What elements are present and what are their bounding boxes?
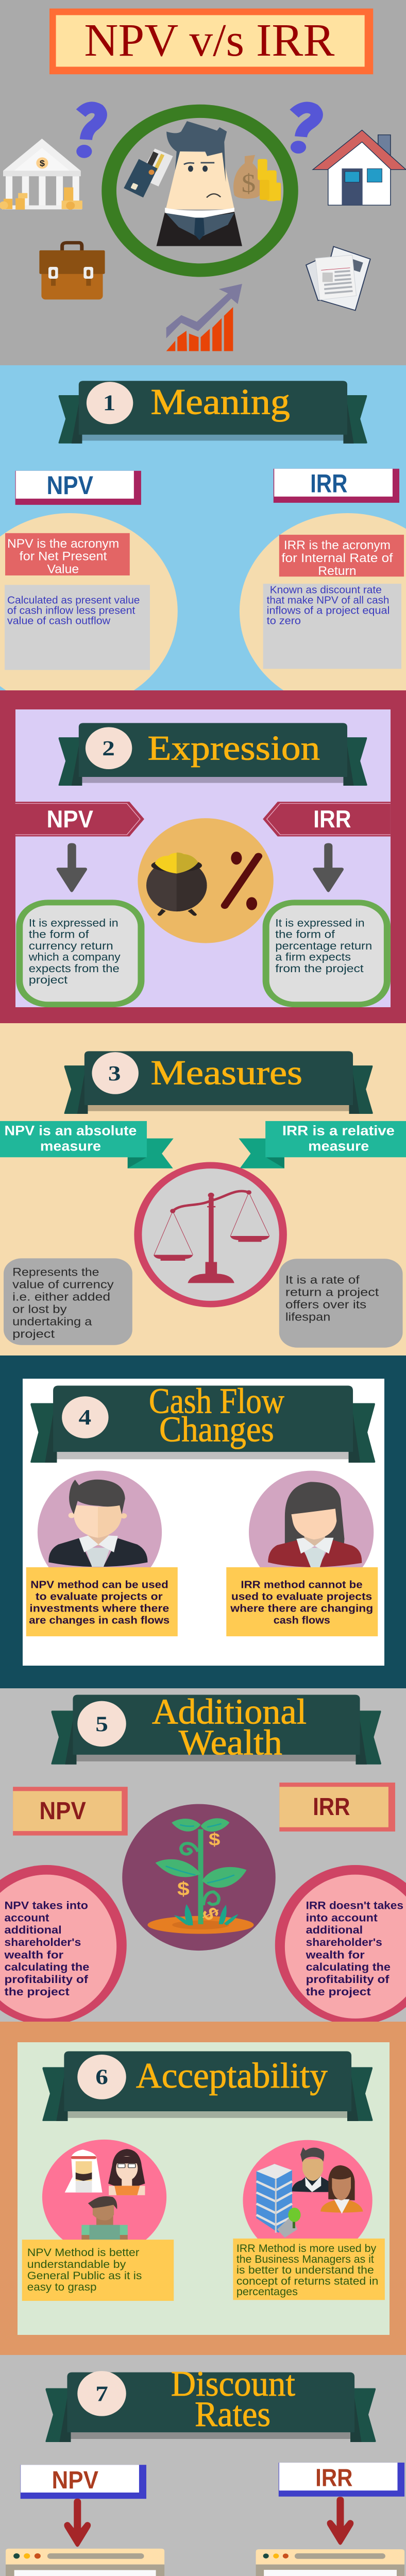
tag: npv: NPV [46,471,93,500]
icon: general public group [42,2140,166,2255]
icon: ring with worried businessman [109,111,291,270]
npv acceptability text: General Public as it is [27,2269,142,2282]
irr wealth text: into account [306,1911,378,1924]
arrow: npv down [64,2499,91,2547]
npv cash flow text: NPV method can be used [30,1579,168,1590]
irr wealth text: shareholder's [306,1936,382,1948]
irr acceptability text: concept of returns stated in [236,2275,378,2287]
banner: 6 acceptability: 6 [95,2065,108,2089]
arrow: npv down [57,843,87,892]
tag: irr [279,2463,404,2497]
banner: 2 expression [58,723,367,786]
npv wealth text: calculating the [5,1961,89,1973]
ribbon: npv absolute measure: measure [40,1139,101,1154]
irr expression: the form of [275,928,335,940]
icon: business managers and building [243,2140,373,2261]
irr measure explanation: return a project [285,1286,379,1299]
tag: irr [274,469,399,503]
npv definition: NPV is the acronym [7,537,119,551]
icon: balance scale [138,1165,283,1304]
irr cash flow text: IRR method cannot be [241,1579,363,1590]
npv wealth text: NPV takes into [5,1899,88,1911]
npv wealth text: profitability of [5,1973,88,1986]
npv measure explanation: project [12,1328,55,1341]
npv wealth text [0,1865,127,2025]
title: NPV v/s IRR [84,14,335,66]
ribbon: npv absolute measure: NPV is an absolute [5,1123,137,1139]
npv expression: the form of [29,928,89,940]
irr wealth text: wealth for [306,1948,365,1961]
npv expression: It is expressed in [29,917,119,929]
npv acceptability text: easy to grasp [27,2281,96,2293]
tag: npv: NPV [39,1797,86,1825]
panel: 5 additional wealth [0,1688,406,2025]
npv measure explanation: i.e. either added [12,1291,110,1303]
tag: irr: IRR [313,1793,350,1821]
irr expression: a firm expects [275,951,351,963]
panel: 6 acceptability [0,2022,406,2355]
npv definition: for Net Present [20,550,107,563]
window: irr discount rate result [256,2549,404,2576]
irr definition: for Internal Rate of [281,551,393,565]
panel: header [0,0,406,365]
icon: money plant: $ [197,1904,224,1924]
tag: npv: NPV [52,2466,98,2494]
irr definition [279,535,404,578]
npv cash flow text [26,1567,178,1636]
irr calculation: that make NPV of all cash [267,595,389,606]
icon: male avatar [38,1471,162,1594]
npv wealth text: account [5,1911,49,1924]
banner: 2 expression: 2 [102,737,115,760]
npv measure explanation: value of currency [12,1278,114,1291]
icon: money bag and coins: $ [242,170,256,198]
banner: 5 additional wealth [51,1692,381,1765]
irr measure explanation [279,1259,403,1348]
npv expression [20,903,141,1005]
arrow: irr down [313,843,344,892]
panel: 2 expression [0,690,406,1023]
npv definition [5,533,130,576]
npv measure explanation: or lost by [12,1303,67,1316]
banner: 3 measures: 3 [108,1061,121,1085]
npv measure explanation [4,1258,132,1345]
icon: documents [306,246,370,310]
icon: question mark right [291,108,317,154]
banner: 7 discount rates: 7 [95,2382,108,2406]
icon: money bag and coins [233,155,281,201]
banner: 5 additional wealth: Wealth [179,1723,282,1762]
npv cash flow text: investments where there [29,1602,169,1614]
ribbon: irr relative measure: measure [308,1139,369,1154]
banner: 1 meaning: Meaning [151,382,290,422]
npv acceptability text: understandable by [27,2258,126,2270]
tag: irr [279,1783,395,1832]
banner: 5 additional wealth: 5 [95,1712,108,1736]
banner: 4 cash flow changes: Changes [159,1410,274,1449]
irr definition: IRR is the acronym [284,538,391,552]
tag: npv [21,2465,146,2499]
icon: money plant: $ [177,1878,190,1900]
irr wealth text [275,1865,406,2025]
npv calculation [5,585,150,670]
irr expression: It is expressed in [275,917,365,929]
tag: npv [15,802,144,836]
banner: 6 acceptability [42,2052,373,2121]
banner: 7 discount rates [45,2364,376,2442]
icon: house [313,130,406,205]
irr wealth text: additional [306,1924,363,1936]
irr measure explanation: lifespan [285,1311,330,1324]
banner: 6 acceptability: Acceptability [136,2056,328,2096]
irr acceptability text: IRR Method is more used by [236,2243,377,2255]
window: npv discount rate result [6,2549,164,2576]
ribbon: irr relative measure [239,1121,406,1168]
irr expression: from the project [275,962,364,975]
tag: irr: IRR [310,469,347,498]
irr expression: percentage return [275,940,372,952]
irr measure explanation: offers over its [285,1299,366,1311]
irr acceptability text [233,2239,385,2300]
npv measure explanation: Represents the [12,1266,99,1279]
icon: female avatar [249,1471,374,1594]
npv expression: expects from the [29,962,120,975]
icon: pot of gold and percent [138,818,274,943]
tag: irr: IRR [315,2464,353,2492]
icon: bank: $ [40,158,45,168]
irr calculation [263,584,401,669]
npv expression: project [29,974,68,986]
irr cash flow text: where there are changing [230,1602,373,1614]
icon: money plant: $ [209,1829,220,1849]
irr expression [266,903,387,1005]
icon: briefcase [39,243,105,299]
banner: 4 cash flow changes: Cash Flow [149,1381,284,1421]
npv calculation: of cash inflow less present [7,605,135,616]
npv measure explanation: undertaking a [12,1315,92,1328]
panel: 3 measures [0,1023,406,1355]
npv wealth text: additional [5,1924,62,1936]
banner: 3 measures [64,1051,373,1114]
irr acceptability text: is better to understand the [236,2264,374,2276]
panel: 1 meaning [0,365,406,709]
irr wealth text: profitability of [306,1973,390,1986]
panel: 4 cash flow changes [0,1355,406,1688]
npv wealth text: shareholder's [5,1936,81,1948]
npv calculation: Calculated as present value [7,595,140,606]
banner: 2 expression: Expression [147,729,320,768]
ribbon: irr relative measure: IRR is a relative [282,1123,395,1139]
npv cash flow text: to evaluate projects or [36,1590,163,1602]
irr calculation: Known as discount rate [270,584,382,596]
irr cash flow text [226,1567,378,1636]
circle: irr background [240,513,406,709]
npv wealth text: the project [5,1986,70,1998]
banner: 4 cash flow changes: 4 [79,1405,91,1429]
banner: 3 measures: Measures [151,1054,302,1092]
banner: 1 meaning [58,381,367,444]
banner: 7 discount rates: Discount [171,2364,295,2404]
ribbon: npv absolute measure [0,1121,174,1168]
irr acceptability text: percentages [236,2286,298,2298]
irr calculation: to zero [267,615,301,626]
irr cash flow text: cash flows [274,1614,330,1626]
npv calculation: value of cash outflow [7,615,111,626]
npv expression: currency return [29,940,113,952]
npv wealth text: wealth for [4,1948,63,1961]
irr definition: Return [318,564,357,578]
tag: npv [13,1787,128,1836]
icon: growth chart [166,284,242,351]
icon: question mark left [76,107,101,158]
irr wealth text: the project [306,1986,371,1998]
banner: 1 meaning: 1 [103,390,115,415]
banner: 4 cash flow changes [30,1381,375,1463]
irr wealth text: calculating the [306,1961,391,1973]
icon: bank cards [124,148,173,197]
npv expression: which a company [28,951,121,963]
npv definition: Value [47,563,79,576]
arrow: irr down [327,2497,353,2545]
npv acceptability text: NPV Method is better [27,2246,140,2259]
npv acceptability text [22,2240,174,2301]
icon: money plant [122,1804,276,1951]
tag: irr: IRR [313,806,351,833]
icon: bank [0,139,82,210]
banner: 5 additional wealth: Additional [152,1692,307,1732]
irr measure explanation: It is a rate of [285,1274,360,1286]
tag: npv: NPV [46,806,93,833]
irr cash flow text: used to evaluate projects [231,1590,372,1602]
npv cash flow text: are changes in cash flows [29,1614,170,1626]
panel: 7 discount rates [0,2355,406,2576]
irr calculation: inflows of a project equal [267,605,390,616]
banner: 7 discount rates: Rates [195,2395,270,2434]
irr acceptability text: the Business Managers as it [236,2253,374,2265]
tag: npv [15,471,141,505]
circle: npv background [0,513,178,709]
tag: irr [263,802,391,836]
title [49,9,373,74]
